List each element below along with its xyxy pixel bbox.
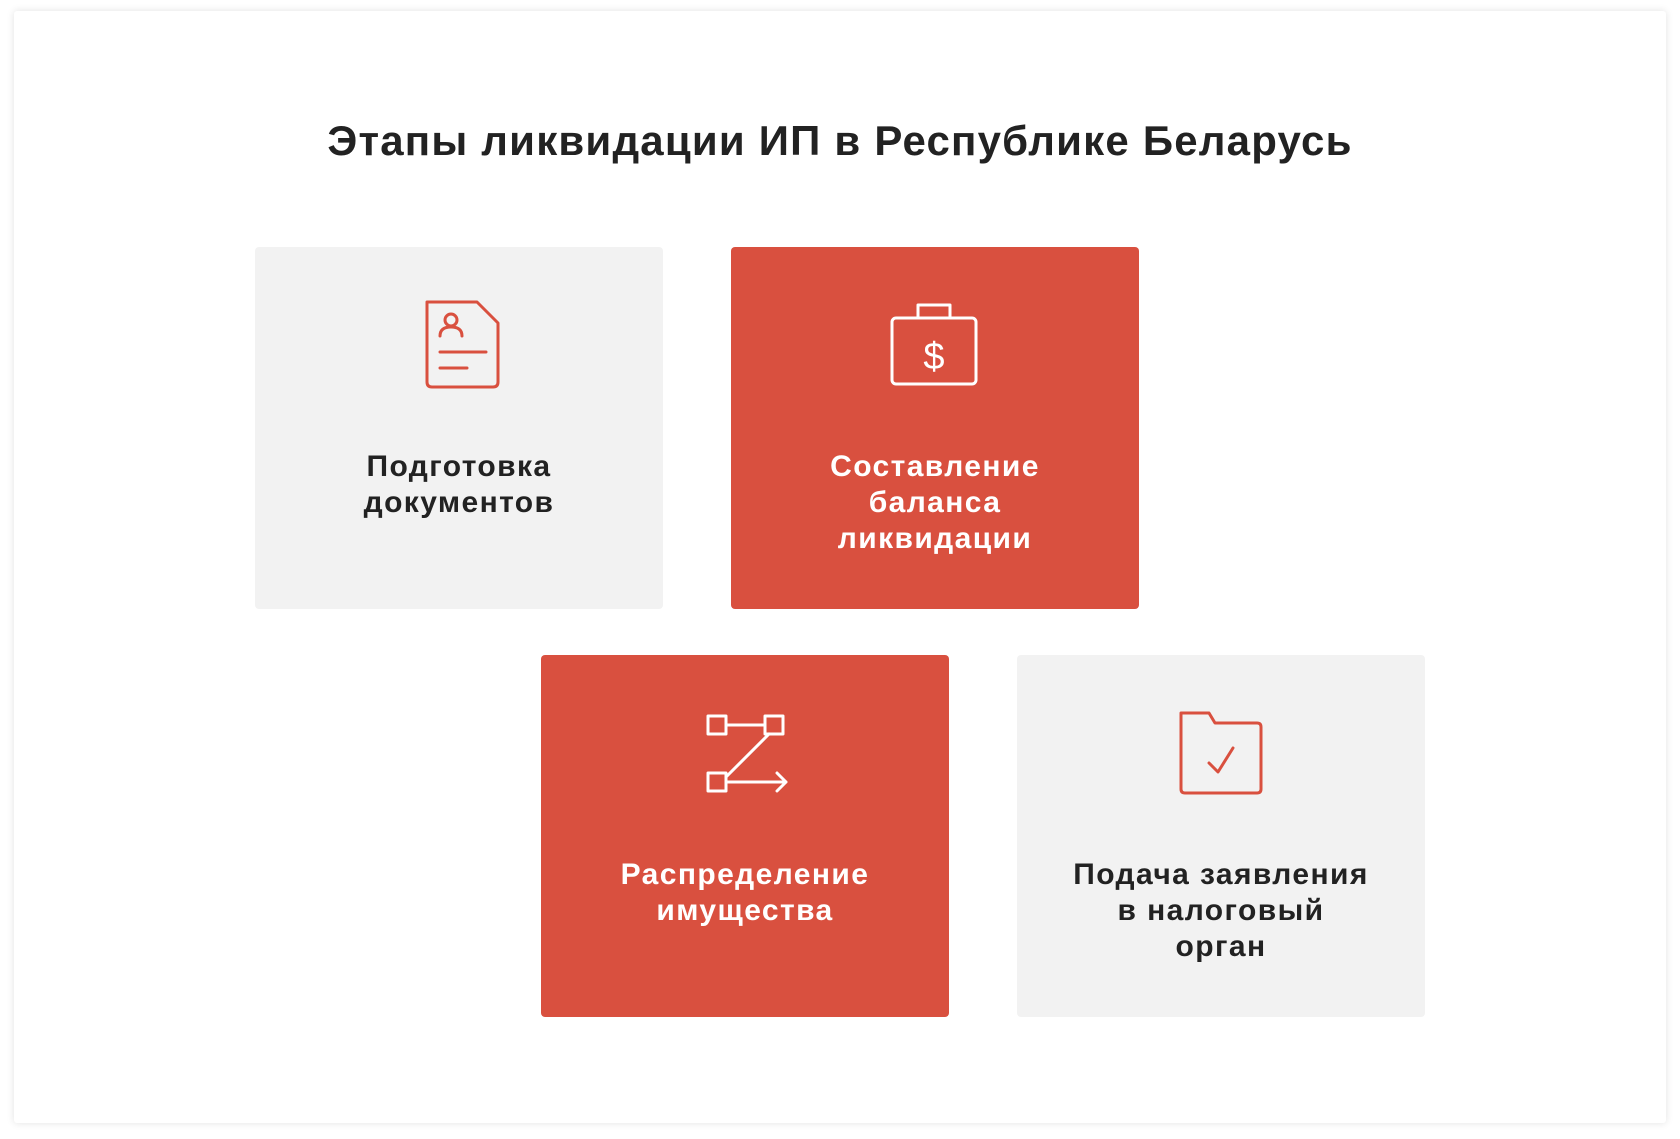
text: в налоговый bbox=[1118, 894, 1324, 927]
text: Подача заявления bbox=[1073, 858, 1369, 891]
icon: case with dollar bbox=[890, 304, 978, 386]
text: баланса bbox=[869, 486, 1001, 519]
icon: case with dollar: $ bbox=[923, 336, 945, 378]
text bbox=[1073, 858, 1369, 963]
panel: step 2 bbox=[731, 247, 1139, 609]
text: Подготовка bbox=[366, 450, 551, 483]
icon: folder check bbox=[1180, 712, 1262, 794]
icon: document with person bbox=[426, 300, 500, 388]
text bbox=[364, 450, 554, 519]
text bbox=[621, 858, 869, 927]
text: орган bbox=[1176, 930, 1266, 963]
text: имущества bbox=[656, 894, 834, 927]
panel: step 1 bbox=[255, 247, 663, 609]
text: документов bbox=[364, 486, 554, 519]
title: Этапы ликвидации ИП в Республике Беларусь bbox=[327, 117, 1353, 164]
icon: distribution path bbox=[706, 714, 788, 793]
text: ликвидации bbox=[838, 522, 1032, 555]
text bbox=[830, 450, 1040, 555]
panel: step 3 bbox=[541, 655, 949, 1017]
panel: step 4 bbox=[1017, 655, 1425, 1017]
text: Распределение bbox=[621, 858, 869, 891]
text: Составление bbox=[830, 450, 1040, 483]
